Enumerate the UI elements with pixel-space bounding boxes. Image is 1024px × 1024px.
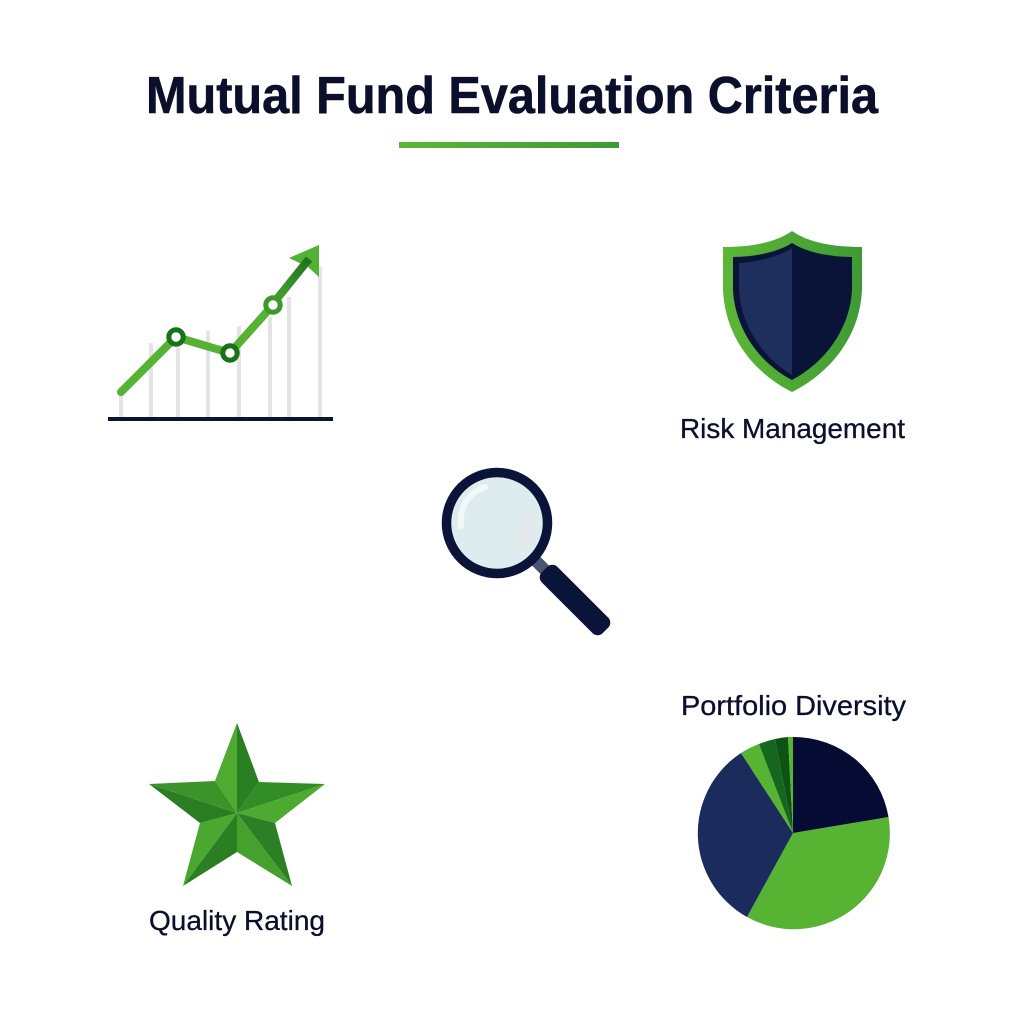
icon: star bbox=[149, 723, 325, 886]
label: portfolio diversity: Portfolio Diversity bbox=[681, 690, 906, 721]
icon: pie chart bbox=[698, 737, 890, 929]
title: Mutual Fund Evaluation Criteria bbox=[146, 67, 879, 125]
icon: shield bbox=[723, 231, 862, 392]
label: quality rating: Quality Rating bbox=[149, 905, 325, 936]
label: risk management: Risk Management bbox=[680, 413, 905, 444]
title underline bbox=[399, 142, 619, 148]
icon: magnifying glass bbox=[446, 472, 613, 638]
icon: performance line chart bbox=[108, 245, 333, 421]
